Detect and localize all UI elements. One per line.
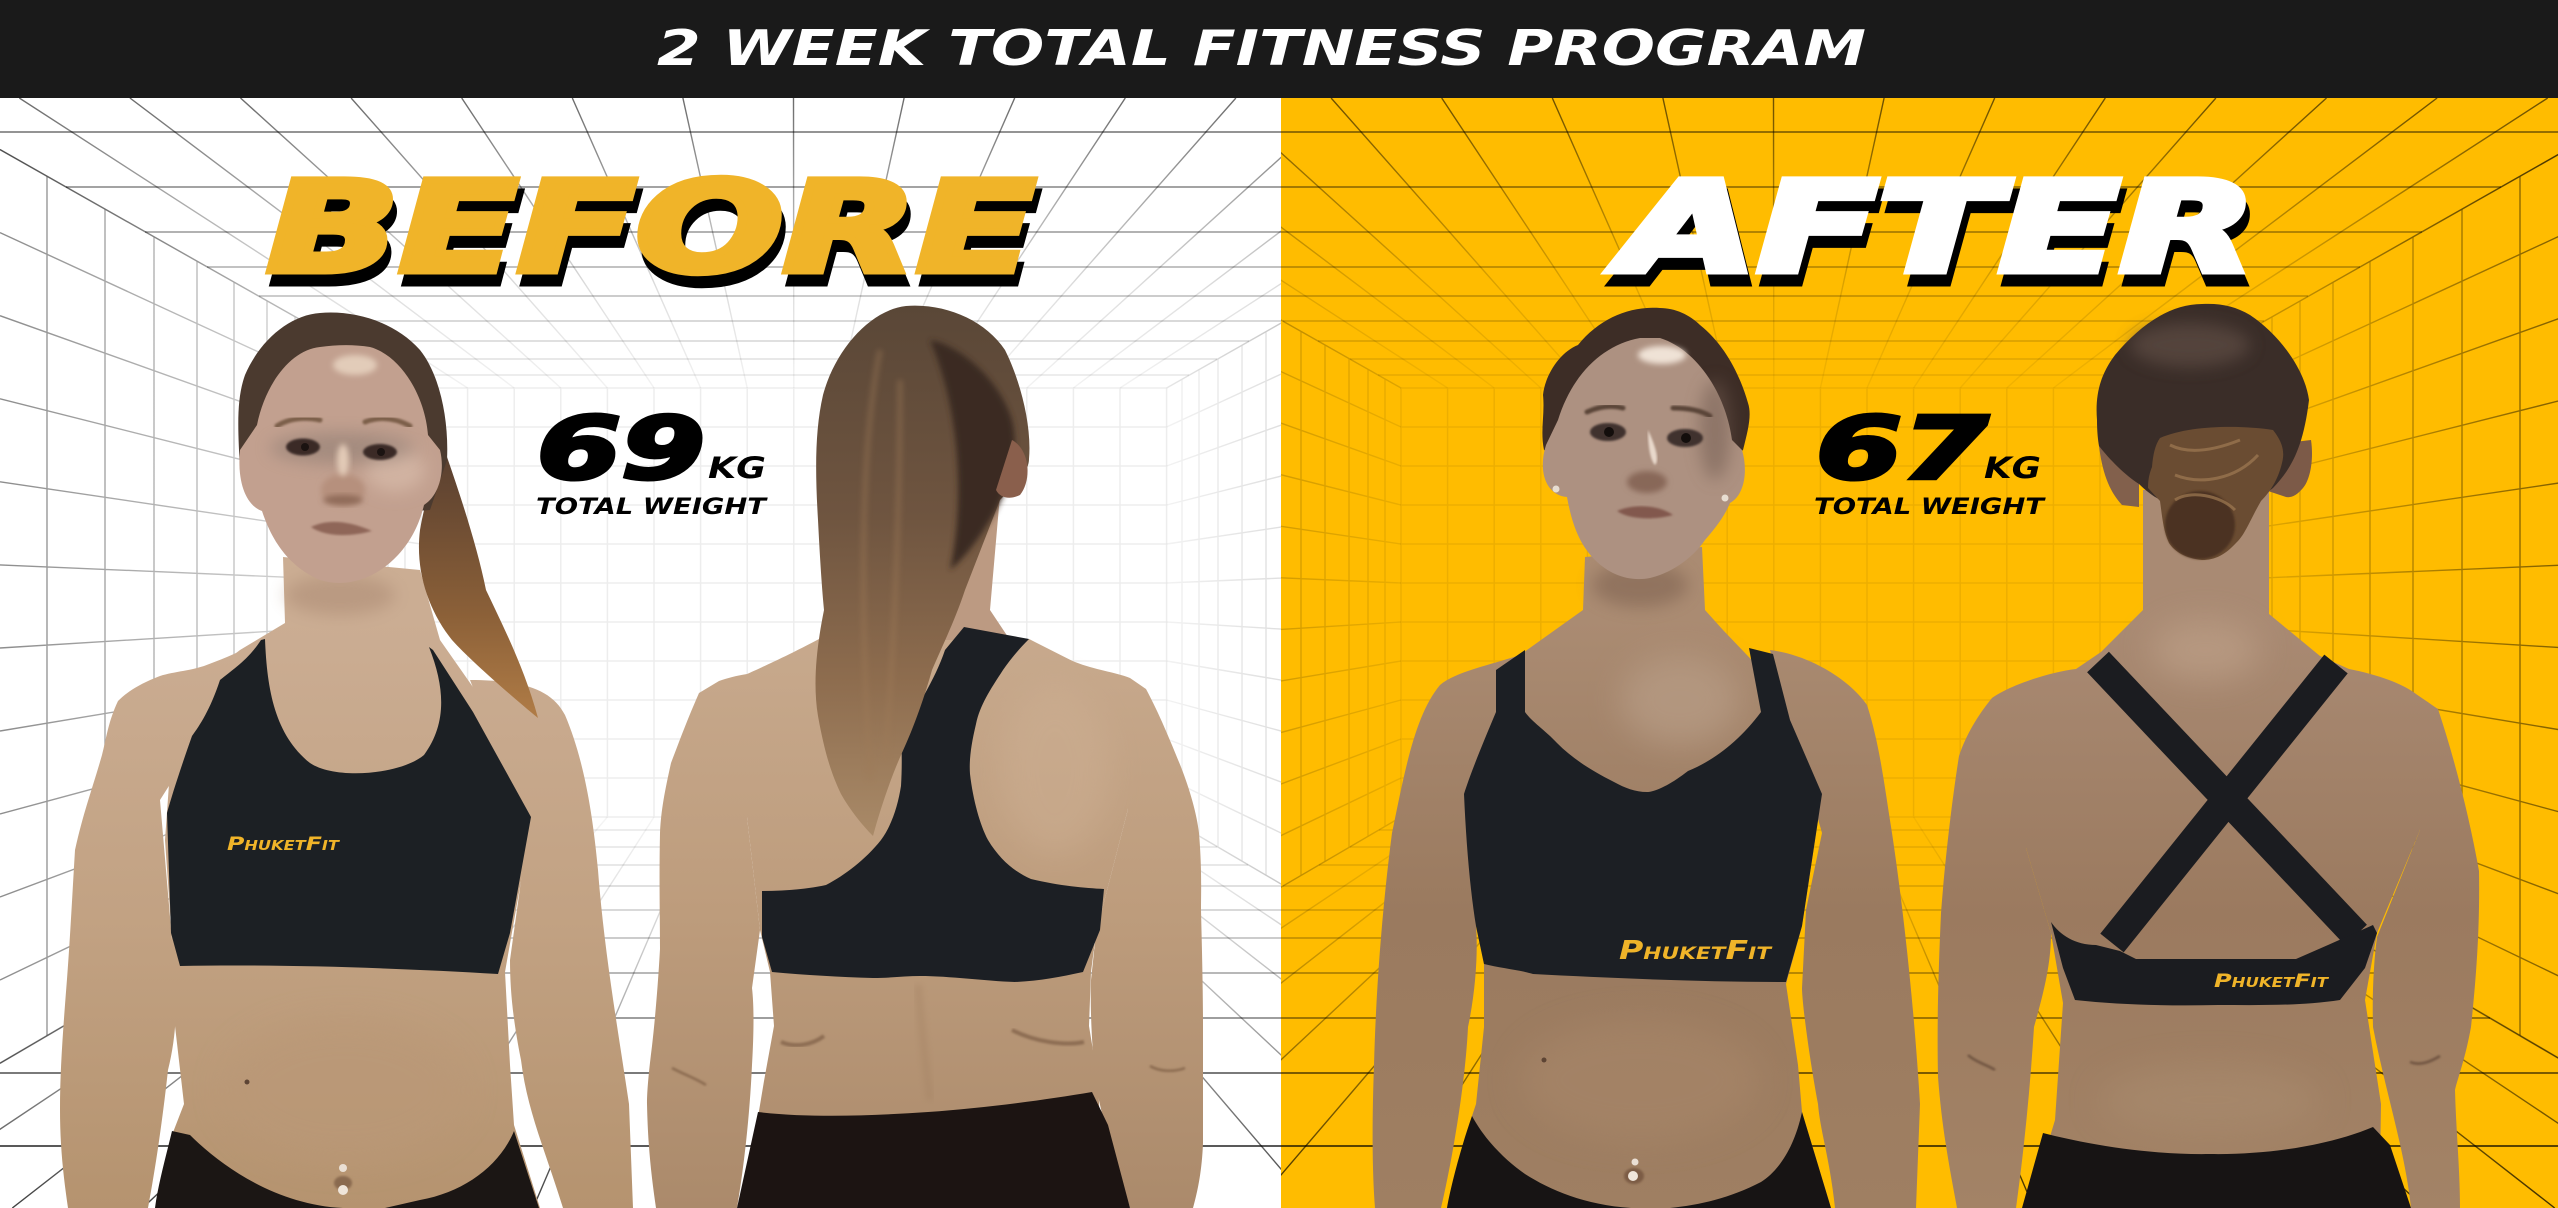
sports bra — [167, 639, 531, 974]
arm lit — [1000, 685, 1110, 855]
heading: AFTER — [1607, 156, 2260, 313]
panel: after background — [1281, 98, 2558, 1208]
bun highlights — [2170, 440, 2258, 510]
figure: before, front view — [60, 313, 633, 1208]
right arm — [1029, 639, 1203, 1208]
hair shine — [2130, 323, 2250, 367]
waist folds — [781, 1030, 1084, 1045]
head back — [816, 306, 1029, 836]
side ponytail — [419, 457, 538, 718]
neck and torso — [165, 557, 540, 1208]
logo: PhuketFit: P HUKET F IT — [2214, 970, 2329, 992]
leggings — [1447, 1112, 1831, 1208]
weight: 67 kg after: TOTAL WEIGHT — [1814, 495, 2046, 520]
neck shadow — [285, 575, 395, 615]
shoulder light — [2150, 620, 2260, 680]
leggings — [2022, 1127, 2411, 1208]
leggings — [737, 1092, 1130, 1208]
weight: 69 kg before — [536, 399, 768, 520]
figure: after, front view — [1373, 308, 1920, 1208]
left arm — [647, 633, 830, 1208]
weight: 67 kg after — [1814, 399, 2046, 520]
hair — [2097, 304, 2309, 510]
weight: 69 kg before: KG — [708, 451, 766, 485]
title: 2 WEEK TOTAL FITNESS PROGRAM — [657, 20, 1866, 77]
torso shading — [225, 1020, 465, 1160]
dark hair side — [930, 340, 1015, 570]
forehead highlight — [1638, 346, 1686, 364]
left arm — [60, 641, 261, 1208]
logo: PhuketFit: P HUKET FIT — [227, 833, 340, 855]
logo: PhuketFit: P HUKET F IT — [1619, 936, 1773, 966]
right arm — [2349, 669, 2479, 1208]
bra back — [762, 627, 1104, 982]
face — [1543, 338, 1745, 579]
heading: BEFORE: BEFORE — [267, 156, 1035, 301]
heading: BEFORE: BEFORE — [271, 168, 1039, 313]
back — [745, 633, 1128, 1135]
bra band — [2051, 922, 2377, 1005]
brows — [277, 418, 410, 426]
neck and torso — [1447, 547, 1831, 1208]
back — [2020, 490, 2420, 1170]
weight: 69 kg before: 69 — [537, 399, 705, 499]
mouth — [311, 522, 372, 535]
right face shadow — [1699, 380, 1731, 480]
panel: before background — [0, 98, 1281, 1208]
mouth — [1617, 506, 1673, 518]
bun — [2148, 427, 2283, 560]
elbow creases — [672, 1066, 1185, 1085]
neck shadow — [1592, 563, 1688, 607]
weight: 67 kg after: KG — [1984, 451, 2041, 485]
navel piercing — [1542, 1058, 1644, 1184]
right arm — [470, 680, 633, 1208]
nose — [1627, 430, 1667, 493]
chest light — [1620, 655, 1740, 745]
perspective grid: after — [1281, 98, 2558, 1208]
neck — [830, 495, 1010, 640]
hair strands — [863, 350, 900, 780]
bra — [1464, 648, 1822, 982]
eye band — [270, 432, 414, 464]
elbow creases — [1968, 1055, 2440, 1070]
perspective grid: before — [0, 98, 1281, 1208]
back straps — [2098, 662, 2356, 943]
hair — [238, 313, 447, 520]
brows — [1587, 406, 1710, 416]
figure: after, back view — [1938, 304, 2479, 1208]
cheek shading — [365, 448, 425, 492]
heading: AFTER: AFTER — [1611, 168, 2260, 313]
heading: AFTER: AFTER — [1607, 156, 2256, 301]
ear — [996, 440, 1028, 498]
left arm — [1938, 669, 2076, 1208]
earrings — [1552, 486, 1728, 502]
header bar — [0, 0, 2558, 98]
weight: 67 kg after: 67 — [1816, 399, 1988, 499]
hair — [1542, 308, 1750, 480]
heading: BEFORE — [267, 156, 1039, 313]
leggings — [155, 1131, 539, 1208]
left arm — [1373, 655, 1520, 1208]
eyes — [286, 438, 397, 460]
forehead highlight — [333, 355, 377, 375]
right arm — [1770, 650, 1920, 1208]
figure: before, back view — [647, 306, 1203, 1208]
ears — [2099, 440, 2312, 507]
bun lower — [2165, 491, 2235, 559]
navel piercing — [244, 1080, 352, 1195]
eyes — [1590, 423, 1703, 447]
weight: 69 kg before: TOTAL WEIGHT — [536, 495, 768, 520]
nose — [321, 444, 365, 506]
face — [239, 345, 442, 583]
